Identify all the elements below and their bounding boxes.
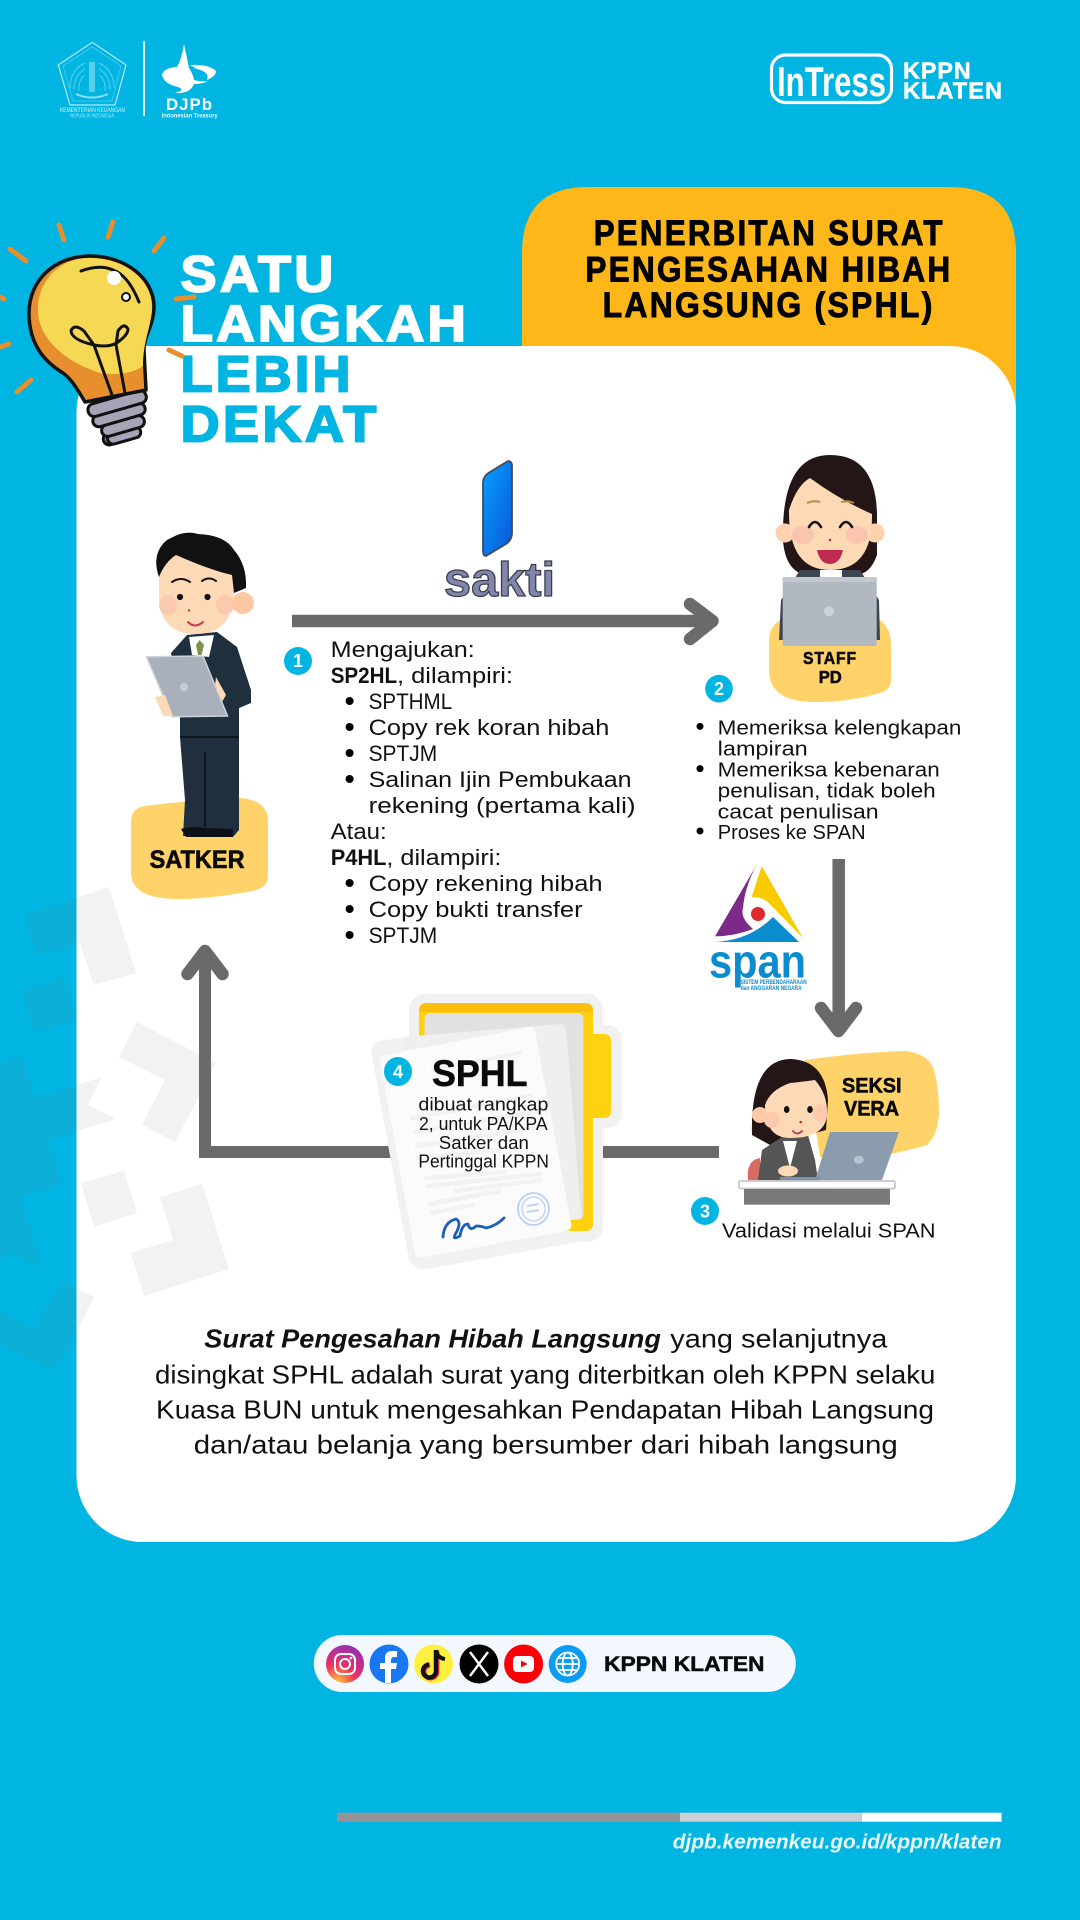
icon: tiktok [414,1644,453,1684]
woman at desk [739,1059,899,1205]
logo: SPAN [709,862,807,992]
panel: title tab [522,187,1016,420]
staff label blob [769,617,891,702]
step 1 text: P4HL [331,845,387,870]
SPHL note: Satker dan [439,1133,529,1153]
front sheet [380,1027,571,1258]
title: PENERBITAN SURAT [594,214,945,253]
header logo: Kementerian Keuangan: KEMENTERIAN KEUANGAN [60,107,125,114]
staff label: STAFF [803,648,857,668]
step 1 text: rekening (pertama kali) [369,793,636,818]
step 1 text: Copy rek koran hibah [369,715,609,740]
headline [180,246,469,452]
step 2 text: cacat penulisan [718,800,879,824]
step 1 text [331,637,636,948]
step 1 text: Copy bukti transfer [369,897,583,922]
step 1 text: SPTJM [369,923,437,948]
vera label: SEKSI [842,1074,902,1098]
woman with laptop [776,455,884,646]
step 2 text: Proses ke SPAN [718,821,866,844]
definition paragraph: Kuasa BUN untuk mengesahkan Pendapatan Hibah Langsung [156,1394,934,1424]
social handle: KPPN KLATEN [604,1653,764,1676]
step 1 text: Mengajukan: [331,637,475,662]
arrow: staff to vera [821,859,856,1031]
step 3 text: Validasi melalui SPAN [722,1220,936,1243]
arrow: vera to satker [188,951,719,1152]
man [146,533,254,837]
footer url: djpb.kemenkeu.go.id/kppn/klaten [673,1830,1002,1853]
header logo: DJPb: Indonesian Treasury [162,113,218,120]
step 1 text: SPTJM [369,741,437,766]
step 2 text: lampiran [718,738,808,761]
definition paragraph: yang selanjutnya [670,1324,888,1354]
title: PENGESAHAN HIBAH [585,250,952,290]
header logo: DJPb: DJPb [166,95,213,114]
folder [419,1003,611,1231]
headline: SATU [180,246,336,302]
social media bar [314,1635,796,1692]
icon: website globe [549,1645,587,1683]
step 1 badge [284,647,312,675]
definition paragraph [155,1324,935,1460]
SPHL note: dibuat rangkap [418,1095,548,1115]
satker label blob [131,798,268,899]
header logo: InTress KPPN Klaten: KLATEN [903,77,1003,103]
headline: LEBIH [180,346,354,402]
definition paragraph: disingkat SPHL adalah surat yang diterbitkan oleh KPPN selaku [155,1360,935,1390]
title: LANGSUNG (SPHL) [603,286,935,325]
headline: DEKAT [180,396,380,452]
panel: main white card [76,346,1016,1542]
step 2 text: Memeriksa kelengkapan [718,717,961,740]
step 2 badge: 2 [714,679,724,699]
definition paragraph: dan/atau belanja yang bersumber dari hibah langsung [194,1430,898,1460]
document halo [373,994,622,1268]
header logo: InTress KPPN Klaten [772,55,1003,105]
icon: light bulb [0,222,194,446]
header logo: Kementerian Keuangan: REPUBLIK INDONESIA [70,114,115,120]
document: SPHL [373,994,622,1268]
header logo: DJPb [162,44,218,120]
vera label blob [805,1051,939,1157]
step 1 text: Salinan Ijin Pembukaan [369,767,632,792]
step 2 text: penulisan, tidak boleh [718,780,936,802]
SPHL note: 2, untuk PA/KPA [419,1114,548,1134]
step 2 text: Memeriksa kebenaran [718,759,940,782]
step 1 text: SPTHML [369,689,452,714]
title [585,214,952,325]
signature [443,1218,504,1238]
figure: Staff PD: PD [819,667,842,687]
SPHL note: Pertinggal KPPN [418,1152,549,1172]
figure: Seksi Vera [739,1051,939,1205]
step 4 badge [384,1057,412,1086]
header logo: InTress KPPN Klaten: KPPN [903,57,972,83]
footer bar [337,1813,1002,1822]
figure: Satker [131,533,268,899]
logo: SPAN: SISTEM PERBENDAHARAAN [741,980,807,986]
divider [143,41,145,116]
logo: SAKTI: sakti [444,554,555,607]
step 1 text: Atau: [331,819,387,844]
back sheet [404,1024,582,1240]
step 1 text: , dilampiri: [386,845,501,870]
header logo: Kementerian Keuangan [58,42,126,119]
step 1 text: Copy rekening hibah [369,871,603,896]
step 3 badge [691,1197,719,1225]
icon: x [460,1644,498,1684]
step 3 badge: 3 [700,1202,710,1222]
step 4 badge: 4 [393,1062,403,1082]
icon: facebook [370,1644,408,1684]
logo: SPAN: dan ANGGARAN NEGARA [741,986,802,992]
background pattern [0,887,229,1371]
step 2 badge [705,675,733,702]
icon: youtube [504,1644,543,1684]
arrow: satker to staff [292,604,712,639]
figure: Seksi Vera: VERA [844,1097,899,1121]
step 1 text: SP2HL [331,663,397,688]
step 2 text [696,717,961,844]
logo: SPAN: span [709,934,806,988]
satker label: SATKER [150,846,245,874]
headline: LANGKAH [180,295,469,352]
sheet placeholder lines [412,1053,546,1213]
SPHL heading: SPHL [432,1053,528,1094]
step 1 badge: 1 [293,651,303,671]
header logo: InTress KPPN Klaten: InTress [777,58,886,105]
SPHL note [418,1095,549,1172]
figure: Staff PD [769,455,891,702]
definition paragraph: Surat Pengesahan Hibah Langsung [204,1324,661,1354]
icon: instagram [326,1645,364,1683]
stamp [518,1193,549,1225]
logo: SAKTI [444,461,555,607]
step 1 text: , dilampiri: [397,663,513,688]
